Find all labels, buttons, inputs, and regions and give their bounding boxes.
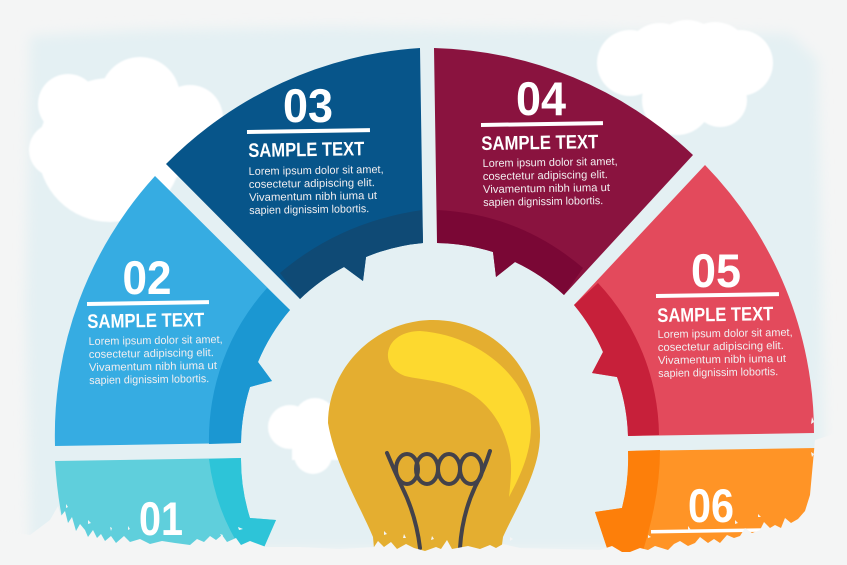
rule and text 03: Lorem ipsum dolor sit amet, — [249, 164, 384, 178]
panel 01 — [55, 458, 276, 552]
rule and text 02: sapien dignissim lobortis. — [89, 373, 209, 387]
bulb highlight — [388, 331, 531, 497]
rule 06 — [651, 528, 773, 533]
light bulb — [328, 320, 540, 560]
number 04: 04 — [516, 72, 566, 125]
rule and text 05: SAMPLE TEXT — [657, 303, 774, 327]
cloud: top left — [29, 57, 223, 222]
cloud: beside bulb — [268, 398, 340, 474]
panel 02 — [55, 176, 290, 446]
panel 03 — [166, 48, 423, 299]
rule and text 04: SAMPLE TEXT — [481, 131, 599, 155]
rule and text 03 — [247, 128, 384, 217]
rule and text 02: cosectetur adipiscing elit. — [89, 347, 214, 361]
rule and text 04: Lorem ipsum dolor sit amet, — [483, 156, 618, 170]
rule and text 05: cosectetur adipiscing elit. — [658, 340, 784, 354]
bulb filament — [387, 451, 490, 548]
panel 05 — [574, 165, 814, 436]
rule and text 05: Lorem ipsum dolor sit amet, — [658, 327, 793, 341]
number 02: 02 — [122, 251, 172, 304]
rule and text 03: cosectetur adipiscing elit. — [249, 177, 375, 191]
number 01: 01 — [139, 492, 183, 545]
rule and text 03: SAMPLE TEXT — [248, 138, 365, 162]
bulb glass — [328, 320, 540, 560]
rule and text 02: Lorem ipsum dolor sit amet, — [89, 334, 223, 348]
number 06: 06 — [688, 479, 734, 532]
rule and text 02 — [87, 300, 223, 387]
rule and text 04: sapien dignissim lobortis. — [483, 195, 603, 209]
cloud: top right — [597, 20, 773, 135]
panel 06 — [595, 448, 815, 560]
rule and text 03: sapien dignissim lobortis. — [249, 203, 369, 217]
rule and text 05: Vivamentum nibh iuma ut — [658, 353, 786, 367]
rule and text 02: SAMPLE TEXT — [87, 309, 205, 333]
rule and text 04: cosectetur adipiscing elit. — [483, 169, 608, 183]
number 03: 03 — [283, 79, 333, 132]
rule and text 04: Vivamentum nibh iuma ut — [483, 182, 610, 196]
rule and text 05: sapien dignissim lobortis. — [658, 366, 778, 380]
rule and text 02: Vivamentum nibh iuma ut — [89, 360, 217, 374]
rule and text 05 — [656, 292, 793, 380]
panel 04 — [434, 48, 693, 295]
rule and text 04 — [481, 121, 618, 209]
rule and text 03: Vivamentum nibh iuma ut — [249, 190, 377, 204]
number 05: 05 — [691, 244, 741, 297]
torn paper bottom edge — [0, 417, 847, 565]
